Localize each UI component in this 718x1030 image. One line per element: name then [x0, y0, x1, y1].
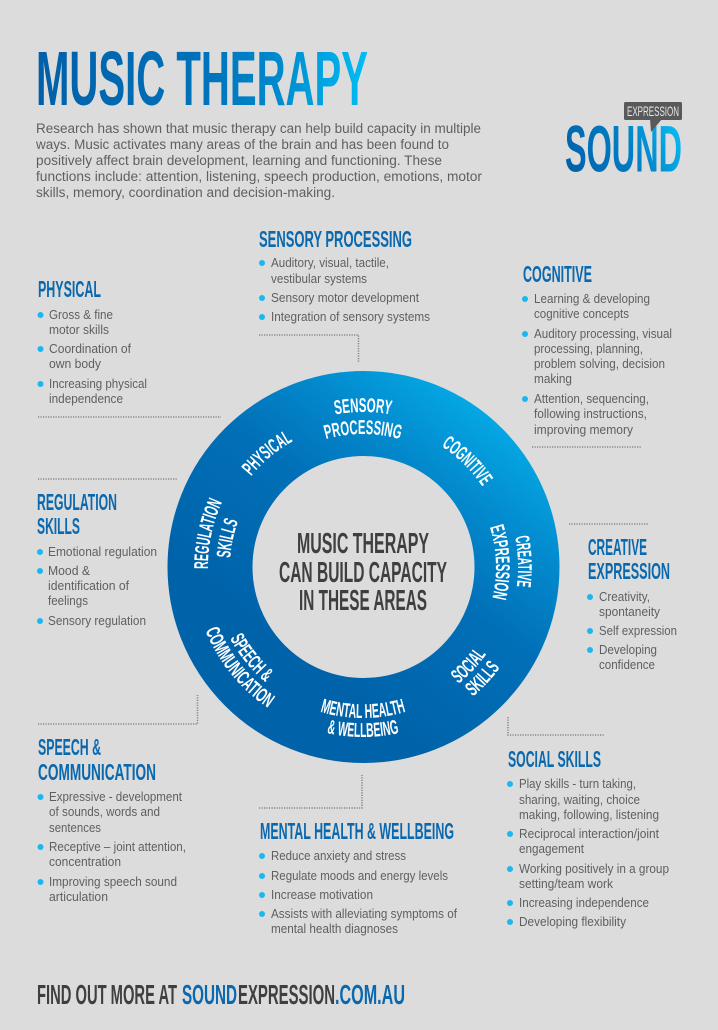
- ring label: regulation skills: [194, 497, 238, 568]
- centre text: CAN BUILD CAPACITY: [279, 557, 447, 589]
- bullet list: Attention, sequencing,: [534, 391, 649, 406]
- bullet list: Auditory processing, visual: [534, 326, 672, 341]
- intro paragraph: Research has shown that music therapy can help build capacity in multiple: [36, 121, 481, 136]
- heading: PHYSICAL: [38, 276, 101, 302]
- footer call to action: EXPRESSION: [238, 979, 335, 1010]
- ring label: mental health and wellbeing: & WELLBEING: [328, 720, 398, 737]
- panel: regulation skills: [37, 489, 157, 628]
- bullet list: Improving speech sound: [49, 874, 177, 889]
- ring label: speech and communication: SPEECH &: [231, 633, 272, 682]
- connector: sensory processing: [259, 335, 358, 362]
- panel: cognitive: [522, 261, 672, 437]
- heading: COGNITIVE: [523, 261, 592, 287]
- bullet list: vestibular systems: [271, 271, 367, 286]
- bullet list: feelings: [48, 593, 88, 608]
- centre text: MUSIC THERAPY: [297, 528, 429, 560]
- intro paragraph: functions include: attention, listening, speech production, emotions, motor: [36, 169, 483, 184]
- bullet list: making, following, listening: [519, 807, 659, 822]
- bullet list: mental health diagnoses: [271, 921, 398, 936]
- heading: [588, 534, 670, 584]
- bullet list: [259, 848, 457, 936]
- ring label: social skills: SKILLS: [465, 660, 499, 696]
- panel: creative expression: [587, 534, 677, 672]
- bullet list: Increase motivation: [271, 887, 373, 902]
- ring label: cognitive: COGNITIVE: [443, 436, 494, 486]
- connector: creative expression: [569, 523, 648, 525]
- connector: regulation skills: [38, 478, 178, 480]
- connector: speech and communication: [38, 695, 198, 724]
- bullet list: concentration: [49, 854, 121, 869]
- logo: Sound Expression: [565, 102, 682, 186]
- bullet list: [507, 776, 669, 929]
- panel: speech and communication: [38, 734, 186, 904]
- ring label: regulation skills: REGULATION: [194, 497, 222, 568]
- bullet list: Expressive - development: [49, 789, 182, 804]
- bullet list: Play skills - turn taking,: [519, 776, 636, 791]
- intro paragraph: ways. Music activates many areas of the brain and has been found to: [35, 137, 449, 152]
- intro paragraph: skills, memory, coordination and decision-making.: [36, 185, 335, 200]
- ring label: social skills: SOCIAL: [451, 650, 486, 683]
- panel: mental health and wellbeing: [259, 818, 457, 936]
- ring label: physical: PHYSICAL: [241, 432, 293, 476]
- intro paragraph: [35, 121, 483, 200]
- ring label: speech and communication: COMMUNICATION: [206, 627, 276, 708]
- heading: SOCIAL SKILLS: [508, 746, 601, 772]
- bullet list: Sensory regulation: [48, 613, 146, 628]
- heading: CREATIVE: [588, 534, 647, 560]
- bullet list: Increasing independence: [519, 895, 649, 910]
- ring label: mental health and wellbeing: [320, 698, 406, 737]
- heading: SPEECH &: [38, 734, 101, 760]
- heading: [38, 734, 156, 785]
- ring label: sensory processing: [323, 398, 402, 439]
- heading: COMMUNICATION: [38, 759, 156, 785]
- bullet list: Emotional regulation: [48, 544, 157, 559]
- heading: REGULATION: [37, 489, 117, 515]
- ring label: creative expression: CREATIVE: [516, 536, 532, 588]
- bullet list: Mood &: [48, 563, 90, 578]
- heading: MENTAL HEALTH & WELLBEING: [260, 818, 454, 844]
- footer call to action: FIND OUT MORE AT: [37, 979, 177, 1010]
- bullet list: Assists with alleviating symptoms of: [271, 906, 457, 921]
- bullet list: identification of: [48, 578, 129, 593]
- connector: physical: [38, 416, 221, 418]
- bullet list: Auditory, visual, tactile,: [271, 255, 389, 270]
- chart: ring of therapy areas: [168, 371, 560, 763]
- bullet list: Learning & developing: [534, 291, 650, 306]
- bullet list: [587, 589, 677, 672]
- bullet list: Receptive – joint attention,: [49, 839, 186, 854]
- bullet list: Developing flexibility: [519, 914, 627, 929]
- footer call to action: SOUND: [182, 979, 237, 1010]
- bullet list: Reduce anxiety and stress: [271, 848, 406, 863]
- bullet list: confidence: [599, 657, 655, 672]
- ring label: social skills: [451, 650, 499, 696]
- bullet list: motor skills: [49, 322, 109, 337]
- ring: [210, 414, 517, 720]
- connector: cognitive: [532, 446, 642, 448]
- bullet list: Developing: [599, 642, 657, 657]
- connector: social skills: [508, 717, 605, 735]
- bullet list: Sensory motor development: [271, 290, 419, 305]
- ring label: creative expression: [490, 524, 532, 600]
- ring label: mental health and wellbeing: MENTAL HEALTH: [320, 698, 406, 718]
- bullet list: Regulate moods and energy levels: [271, 868, 448, 883]
- heading: SKILLS: [37, 513, 80, 539]
- bullet list: Gross & fine: [49, 307, 113, 322]
- bullet list: making: [534, 371, 572, 386]
- title: MUSIC THERAPY: [36, 36, 368, 122]
- bullet list: of sounds, words and: [49, 804, 160, 819]
- panel: social skills: [507, 746, 669, 929]
- bullet list: Coordination of: [49, 341, 131, 356]
- ring label: sensory processing: SENSORY: [334, 398, 393, 414]
- centre text: IN THESE AREAS: [299, 585, 427, 617]
- bullet list: spontaneity: [599, 604, 661, 619]
- heading: SENSORY PROCESSING: [259, 226, 412, 252]
- bullet list: [522, 291, 672, 437]
- bullet list: Self expression: [599, 623, 677, 638]
- bullet list: engagement: [519, 841, 584, 856]
- bullet list: [38, 307, 147, 406]
- bullet list: sharing, waiting, choice: [519, 792, 640, 807]
- panel: sensory processing: [259, 226, 430, 324]
- bullet list: [259, 255, 430, 324]
- bullet list: [38, 789, 186, 904]
- intro paragraph: positively affect brain development, learning and functioning. These: [36, 153, 442, 168]
- ring label: regulation skills: SKILLS: [216, 518, 238, 558]
- connector: mental health: [259, 775, 362, 808]
- bullet list: sentences: [49, 820, 101, 835]
- bullet list: own body: [49, 356, 102, 371]
- bullet list: independence: [49, 391, 123, 406]
- bullet list: Reciprocal interaction/joint: [519, 826, 659, 841]
- ring label: sensory processing: PROCESSING: [323, 420, 402, 439]
- bullet list: Creativity,: [599, 589, 650, 604]
- heading: [37, 489, 117, 539]
- bullet list: Integration of sensory systems: [271, 309, 430, 324]
- ring label: creative expression: EXPRESSION: [490, 524, 510, 600]
- bullet list: setting/team work: [519, 876, 614, 891]
- bullet list: cognitive concepts: [534, 306, 629, 321]
- bullet list: articulation: [49, 889, 108, 904]
- logo speech bubble: EXPRESSION: [627, 103, 679, 119]
- bullet list: Working positively in a group: [519, 861, 669, 876]
- bullet list: [37, 544, 157, 628]
- footer call to action: .COM.AU: [335, 979, 405, 1010]
- bullet list: improving memory: [534, 422, 634, 437]
- bullet list: following instructions,: [534, 406, 647, 421]
- bullet list: problem solving, decision: [534, 356, 665, 371]
- bullet list: processing, planning,: [534, 341, 643, 356]
- panel: physical: [38, 276, 147, 406]
- bullet list: Increasing physical: [49, 376, 147, 391]
- centre text: [279, 528, 447, 617]
